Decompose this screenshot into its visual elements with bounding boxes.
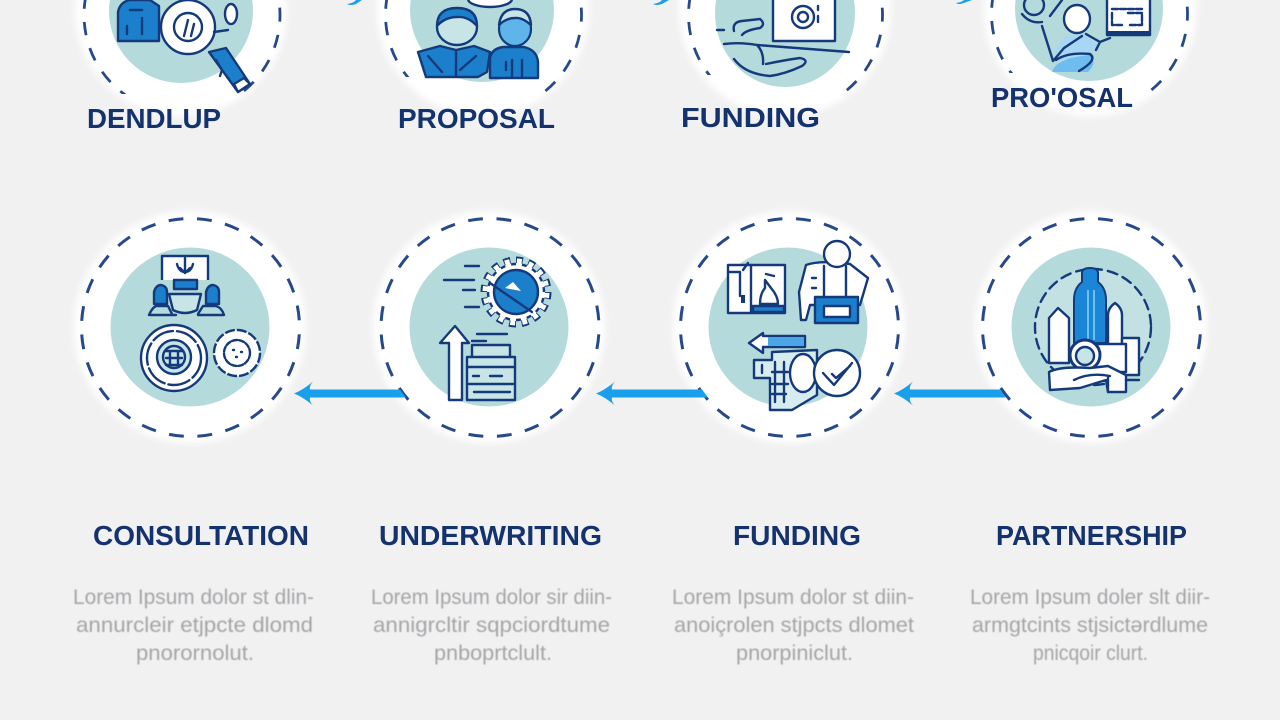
bottom step 1: consultation bbox=[74, 211, 306, 443]
icon: bottles and hand bbox=[1035, 268, 1151, 392]
text block: underwriting: pnboprtclult. bbox=[434, 642, 552, 665]
text block: underwriting: Lorem Ipsum dolor sir diin- bbox=[371, 586, 612, 609]
icon: magnifier and shirt bbox=[118, 0, 250, 92]
bottom step 2: underwriting bbox=[373, 211, 605, 443]
arrow fragment: top 1 bbox=[347, 0, 362, 5]
icon: person with board bbox=[1022, 0, 1150, 72]
arrow: funding to underwriting bbox=[596, 382, 708, 406]
heading: consultation: CONSULTATION bbox=[93, 520, 309, 551]
label: dendlup: DENDLUP bbox=[87, 103, 221, 134]
bottom step 4: partnership bbox=[975, 211, 1207, 443]
text block: consultation bbox=[73, 586, 314, 665]
top step 2: proposal bbox=[377, 0, 589, 116]
label: proposal variant: PRO'OSAL bbox=[991, 82, 1133, 113]
icon: frame, person, check bbox=[728, 241, 868, 410]
text block: funding: Lorem Ipsum dolor st diin- bbox=[672, 586, 914, 609]
bottom step 3: funding bbox=[673, 211, 905, 443]
arrow: underwriting to consultation bbox=[294, 382, 406, 406]
text block: underwriting bbox=[371, 586, 612, 665]
label: funding: FUNDING bbox=[681, 102, 820, 133]
text block: consultation: pnorornolut. bbox=[136, 642, 254, 665]
arrow: partnership to funding bbox=[894, 382, 1006, 406]
icon: gear and documents bbox=[440, 261, 547, 400]
icon: hand and document bbox=[717, 0, 849, 76]
top step 4: proposal bbox=[984, 0, 1196, 116]
text block: funding bbox=[672, 586, 914, 665]
text block: partnership: armgtcints stjsictərdlume bbox=[972, 614, 1208, 637]
text block: funding: pnorpiniclut. bbox=[736, 642, 853, 665]
text block: partnership: Lorem Ipsum doler slt diir- bbox=[970, 586, 1210, 609]
arrow fragment: top 2 bbox=[653, 0, 669, 5]
icon: meeting and coins bbox=[141, 256, 260, 391]
top step 1: dendlup bbox=[75, 0, 287, 116]
text block: partnership: pnicqoir clurt. bbox=[1033, 642, 1148, 665]
top step 3: funding bbox=[679, 0, 891, 116]
label: proposal: PROPOSAL bbox=[398, 103, 555, 134]
text block: consultation: annurcleir etjpcte dlomd bbox=[76, 614, 313, 637]
text block: consultation: Lorem Ipsum dolor st dlin- bbox=[73, 586, 314, 609]
text block: funding: anoiçrolen stjpcts dlomet bbox=[674, 614, 914, 637]
heading: partnership: PARTNERSHIP bbox=[996, 520, 1187, 551]
heading: funding: FUNDING bbox=[733, 520, 861, 551]
text block: partnership bbox=[970, 586, 1210, 665]
text block: underwriting: annigrcltir sqpciordtume bbox=[373, 614, 610, 637]
arrow fragment: top 3 bbox=[956, 0, 972, 4]
heading: underwriting: UNDERWRITING bbox=[379, 520, 602, 551]
icon: two people bbox=[418, 0, 538, 78]
